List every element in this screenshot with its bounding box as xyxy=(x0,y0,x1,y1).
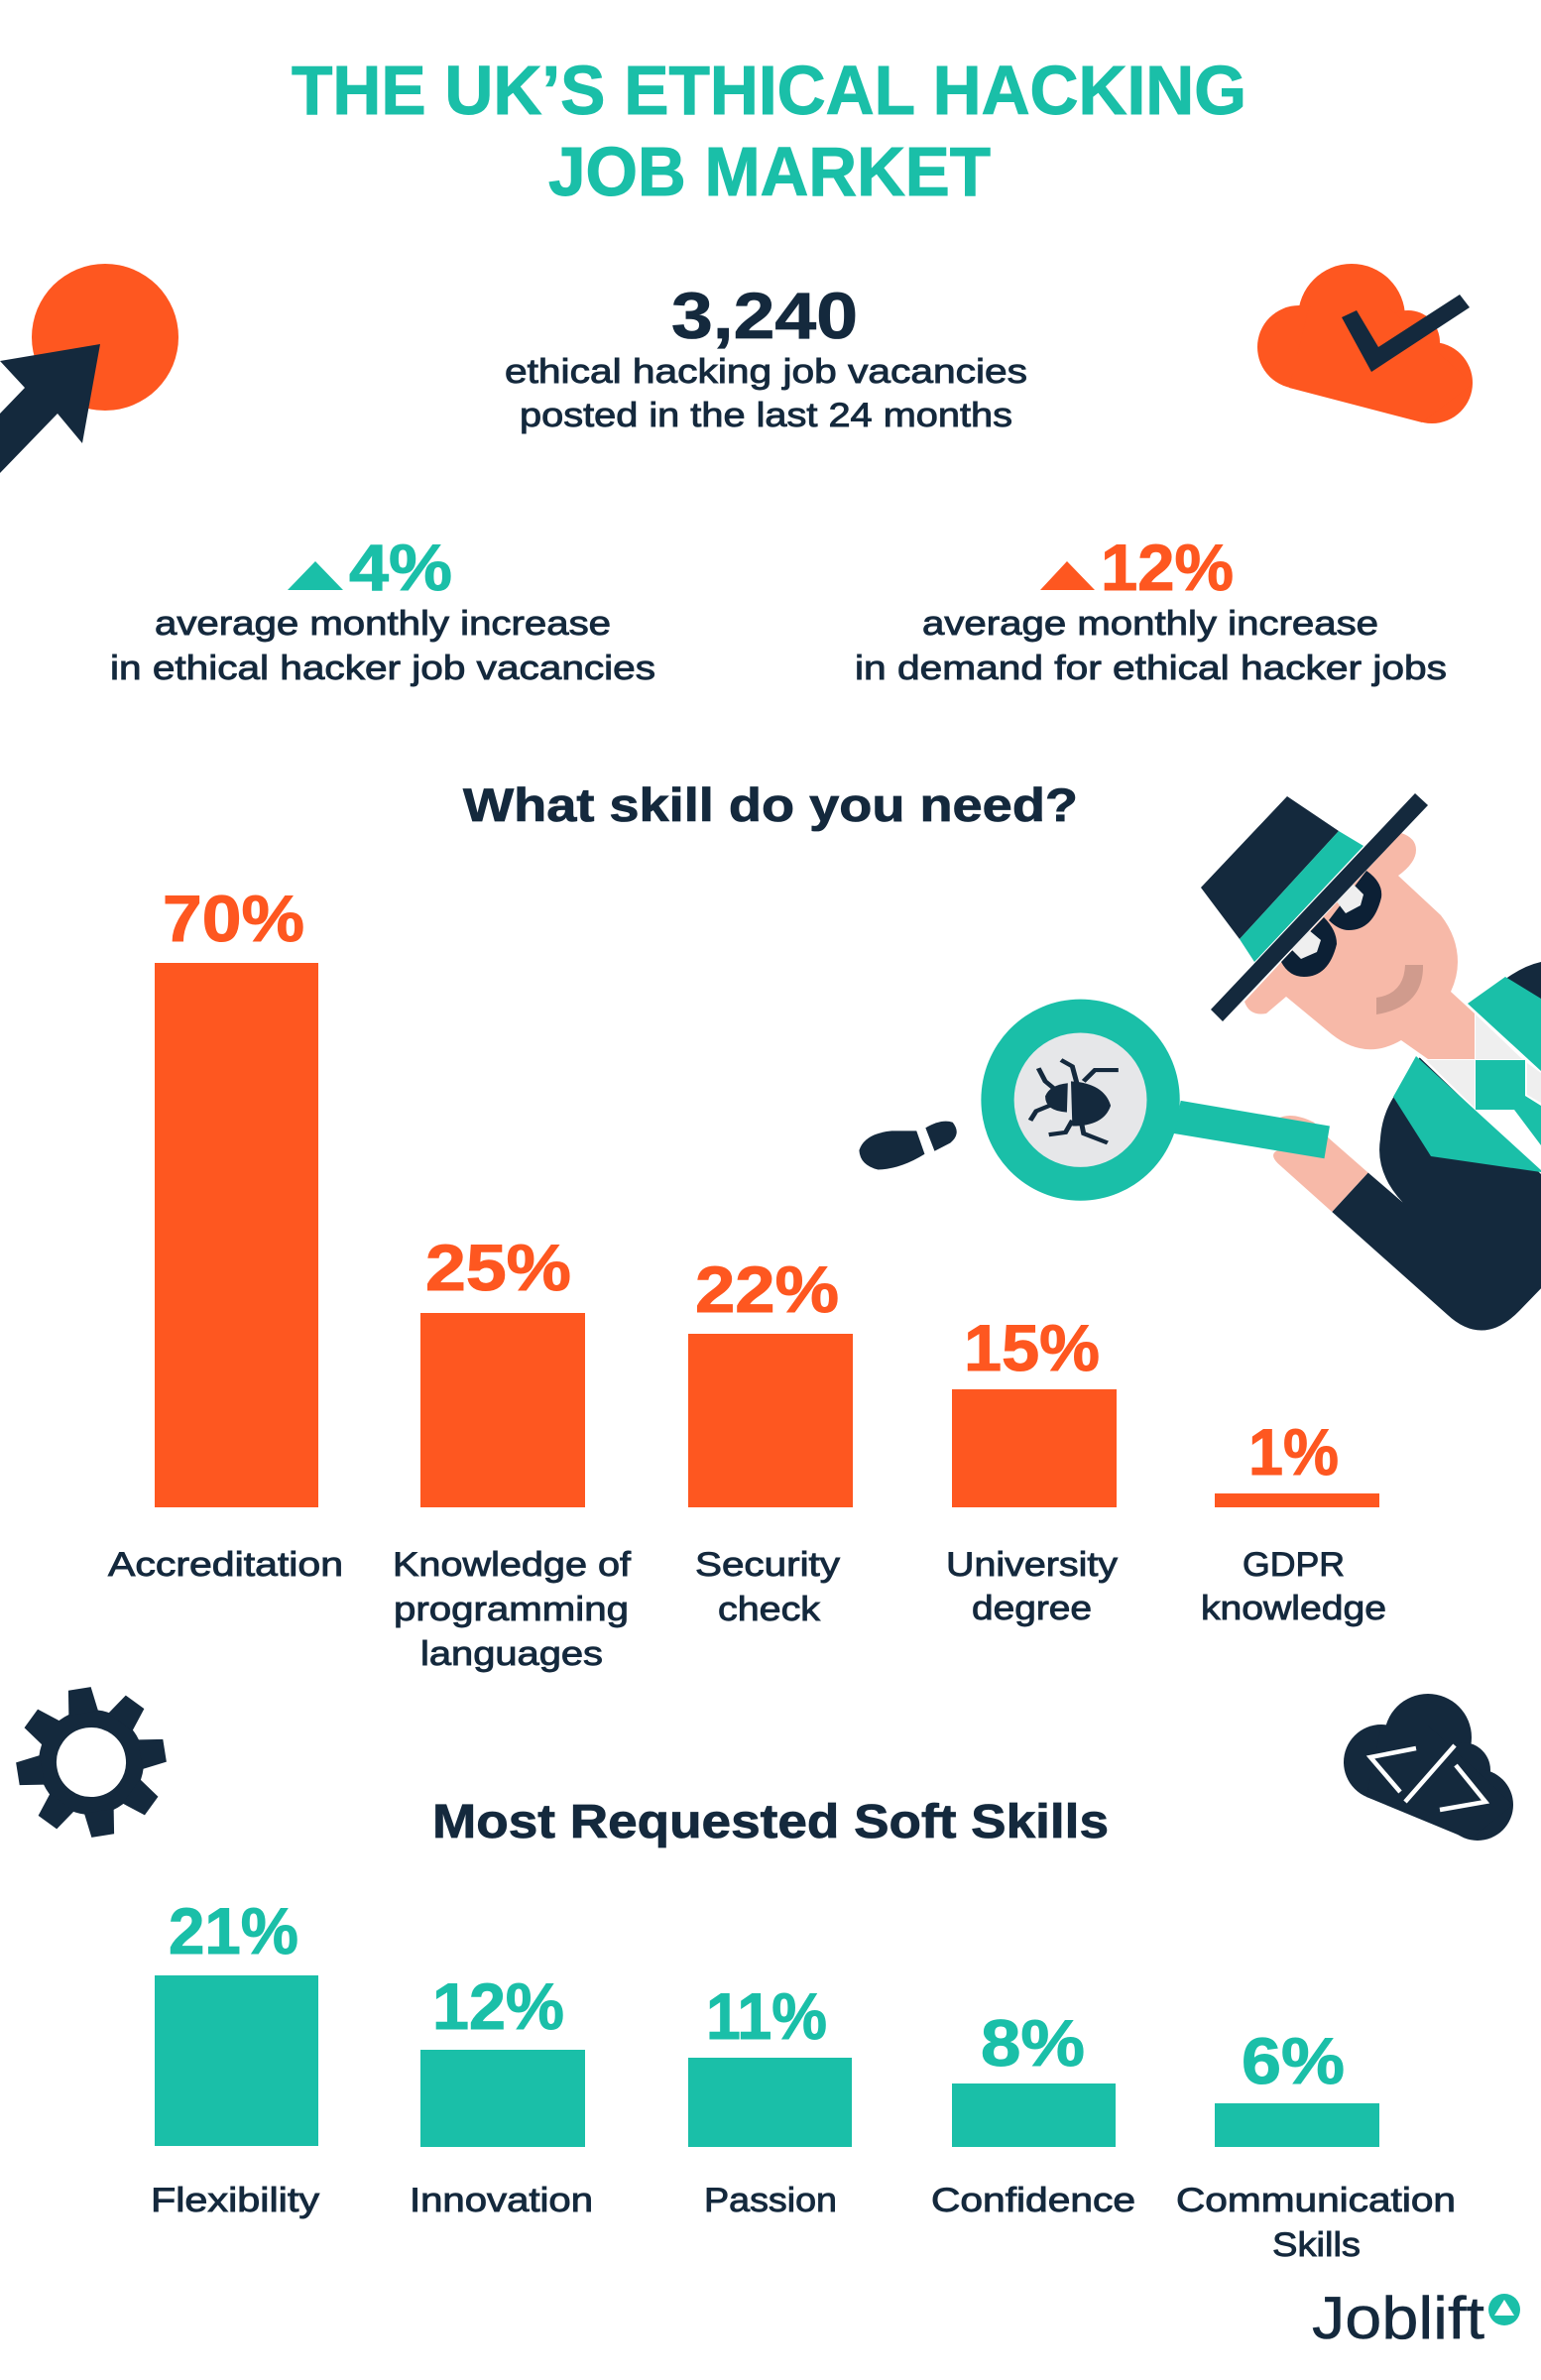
bar: university degree 15%: 15% xyxy=(964,1311,1100,1384)
stat: 4% monthly vacancy increase: 4% xyxy=(349,531,452,604)
stat: total vacancies: ethical hacking job vacancies xyxy=(505,353,1027,391)
icon: footprint xyxy=(859,1122,957,1170)
shirt base xyxy=(1413,992,1541,1174)
bar: communication skills 6%: Skills xyxy=(1272,2226,1361,2264)
stat: 4% monthly vacancy increase xyxy=(110,531,655,687)
bar: accreditation 70%: Accreditation xyxy=(108,1546,343,1584)
icon: orange cloud with check mark xyxy=(1257,264,1473,423)
bar: university degree 15%: degree xyxy=(972,1590,1092,1627)
bar: accreditation 70%: 70% xyxy=(163,882,304,955)
bar: GDPR knowledge 1%: knowledge xyxy=(1201,1590,1386,1627)
title: THE UK’S ETHICAL HACKING xyxy=(292,52,1246,129)
bar: programming languages 25%: languages xyxy=(420,1635,603,1673)
stat: 4% monthly vacancy increase: average monthly increase xyxy=(155,605,611,643)
icon: bug xyxy=(1030,1060,1119,1142)
smile xyxy=(1376,965,1423,1014)
bar: passion 11%: 11% xyxy=(706,1979,827,2053)
bar: innovation 12% xyxy=(410,1969,593,2219)
bar: innovation 12%: 12% xyxy=(432,1969,564,2043)
icon: target circle with arrow xyxy=(0,264,178,473)
bar: security check 22%: 22% xyxy=(695,1252,839,1326)
hat xyxy=(1201,793,1428,1021)
bar: programming languages 25%: Knowledge of xyxy=(393,1546,632,1584)
title: JOB MARKET xyxy=(548,133,991,210)
bar: programming languages 25%: 25% xyxy=(425,1231,571,1304)
icon: navy cloud with code symbol xyxy=(1344,1694,1513,1841)
bar: GDPR knowledge 1%: 1% xyxy=(1248,1415,1339,1488)
stat: 12% monthly demand increase: average monthly increase xyxy=(922,605,1378,643)
bar: communication skills 6% xyxy=(1176,2024,1456,2264)
bar: university degree 15%: University xyxy=(946,1546,1118,1584)
bar: programming languages 25%: programming xyxy=(394,1591,629,1628)
title xyxy=(292,52,1246,210)
bar: passion 11%: Passion xyxy=(704,2182,837,2219)
bar: GDPR knowledge 1% xyxy=(1201,1415,1386,1627)
bar: flexibility 21%: Flexibility xyxy=(151,2182,319,2219)
bar: university degree 15% xyxy=(946,1311,1118,1627)
hand xyxy=(1273,1116,1368,1212)
logo: Joblift: Joblift xyxy=(1312,2285,1484,2351)
bar: security check 22%: check xyxy=(718,1591,821,1628)
bar: security check 22%: Security xyxy=(695,1546,840,1584)
stat: 4% monthly vacancy increase: in ethical hacker job vacancies xyxy=(110,650,655,687)
bar: programming languages 25% xyxy=(393,1231,632,1673)
stat: total vacancies xyxy=(505,279,1027,434)
bar chart: hard skills xyxy=(108,882,1386,1673)
bar: security check 22% xyxy=(688,1252,853,1628)
bar: accreditation 70% xyxy=(108,882,343,1584)
bar: flexibility 21%: 21% xyxy=(169,1894,298,1967)
bar: confidence 8%: Confidence xyxy=(931,2182,1135,2219)
heading: most requested soft skills: Most Requested Soft Skills xyxy=(432,1796,1109,1848)
bar: GDPR knowledge 1%: GDPR xyxy=(1243,1546,1345,1584)
bar: communication skills 6%: Communication xyxy=(1176,2182,1456,2219)
illustration: detective with magnifying glass xyxy=(859,793,1541,1331)
stat: total vacancies: 3,240 xyxy=(671,279,858,352)
magnifying glass xyxy=(981,1000,1330,1201)
sunglasses xyxy=(1281,871,1381,977)
heading: what skill do you need: What skill do you need? xyxy=(463,778,1078,831)
bar: innovation 12%: Innovation xyxy=(410,2182,593,2219)
bar: passion 11% xyxy=(688,1979,852,2219)
shirt, tie and lapels xyxy=(1393,977,1541,1172)
stat: 12% monthly demand increase: in demand for ethical hacker jobs xyxy=(855,650,1447,687)
icon: gear xyxy=(6,1677,177,1847)
bar chart: soft skills xyxy=(151,1894,1456,2264)
face and neck xyxy=(1245,833,1475,1059)
suit body xyxy=(1332,962,1541,1331)
bar: flexibility 21% xyxy=(151,1894,319,2219)
stat: total vacancies: posted in the last 24 months xyxy=(520,397,1012,434)
stat: 12% monthly demand increase: 12% xyxy=(1101,531,1234,604)
bar: communication skills 6%: 6% xyxy=(1242,2024,1345,2097)
bar: confidence 8% xyxy=(931,2006,1135,2219)
stat: 12% monthly demand increase xyxy=(855,531,1447,687)
bar: confidence 8%: 8% xyxy=(981,2006,1085,2080)
